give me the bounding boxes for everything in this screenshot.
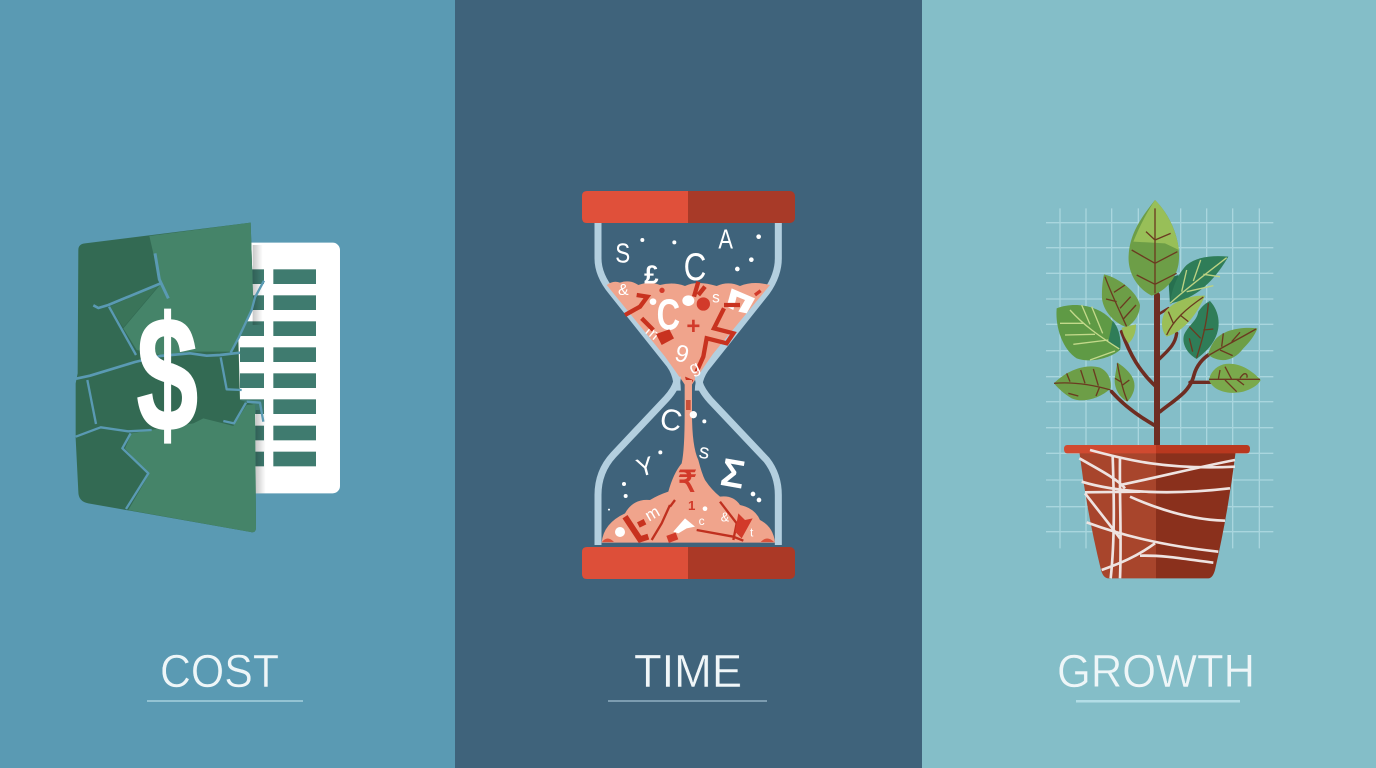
dollar sign: $ [136,283,198,466]
sand symbols: g [686,356,703,378]
cracked green cover shards [76,223,264,532]
label: COST: COST [160,645,279,697]
terracotta pot [1064,445,1250,578]
label: TIME: TIME [634,645,742,697]
sand symbols [618,282,761,390]
crack lines [76,253,264,509]
bottom cap [582,547,795,579]
sand symbols [602,466,774,543]
upper bulb: £ [644,259,659,289]
sand symbols: 1 [688,498,696,513]
underline: GROWTH [1076,700,1240,702]
sand symbols: t [750,526,754,540]
label: GROWTH: GROWTH [1057,645,1255,697]
sand symbols: s [712,290,720,307]
white spreadsheet sheet [233,243,340,493]
lower bulb [598,377,778,545]
sand symbols: & [618,282,629,299]
underline: TIME [608,700,767,702]
upper bulb [598,222,778,391]
panel: growth [922,0,1376,768]
upper bulb: A [718,225,733,255]
leaves [1054,200,1261,402]
icon: potted plant over grid [1046,200,1273,578]
sand symbols: m [641,502,663,525]
upper bulb: S [615,239,630,269]
background grid [1046,208,1273,548]
sand symbols: C [657,291,680,340]
stem and branches [1112,295,1210,444]
pot cracks [1079,450,1235,578]
lower bulb: s [698,440,711,464]
lower bulb: Y [633,452,657,483]
sand symbols: & [721,511,730,525]
lower bulb: C [657,403,685,439]
upper bulb: C [684,245,706,289]
underline: COST [147,700,303,702]
sand symbols: ₹ [678,466,697,499]
sand symbols: m [642,323,663,344]
lower bulb: Σ [717,450,748,498]
sand symbols: 9 [672,340,692,369]
sand symbols: + [686,313,700,340]
panel: time [455,0,922,768]
panel: cost [0,0,455,768]
top cap [582,191,795,223]
sand symbols: c [699,514,705,528]
icon: cracked spreadsheet with dollar sign [76,223,340,532]
icon: hourglass of falling symbols [582,191,795,579]
